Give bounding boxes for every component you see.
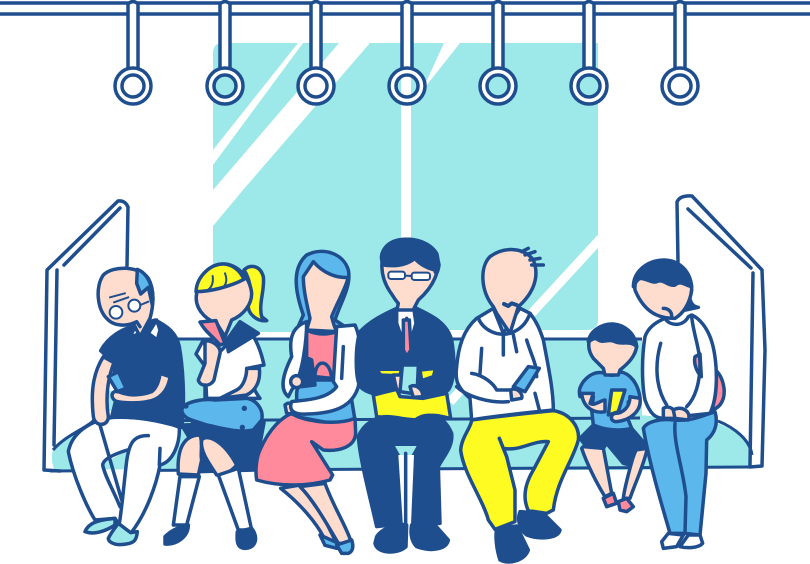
passenger: man in white hoodie and yellow trousers: [456, 248, 579, 562]
passenger: elderly man with cane: [68, 268, 183, 545]
passenger: mother in white sweater and blue jeans: [633, 260, 724, 548]
right side panel: [677, 196, 765, 467]
hanging straps: [115, 2, 698, 104]
seat: [50, 238, 752, 471]
passenger: schoolgirl with phone: [165, 264, 267, 548]
hand rail: [0, 3, 810, 14]
passenger: businessman with glasses: [356, 239, 454, 552]
passenger: woman with blue hair and pink skirt: [256, 251, 361, 553]
passenger: boy with yellow phone: [579, 324, 647, 512]
left side panel: [44, 201, 128, 471]
window: [213, 43, 598, 332]
